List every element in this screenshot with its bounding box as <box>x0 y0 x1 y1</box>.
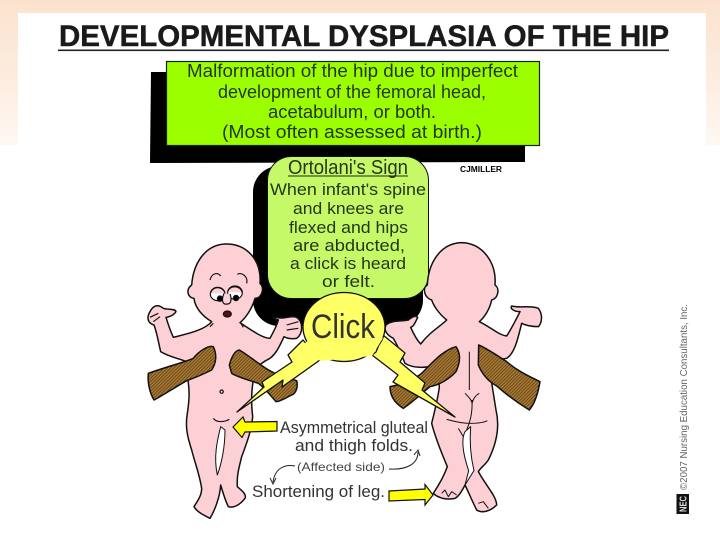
arrow: to left thigh <box>233 417 277 438</box>
face <box>210 274 247 317</box>
Ortolani text: or felt. <box>322 272 375 291</box>
panel: Ortolani's sign <box>253 156 428 326</box>
click bubble with lightning bolts <box>237 292 455 417</box>
arrow: to right foot <box>389 484 433 505</box>
definition text: acetabulum, or both. <box>268 102 436 122</box>
right lightning bolt <box>372 335 455 417</box>
baby body back <box>385 243 541 512</box>
publisher logo: NEC <box>678 496 690 512</box>
Ortolani text: are abducted, <box>293 236 405 255</box>
label: shortening of leg: Shortening of leg. <box>252 482 385 501</box>
left baby (front view) <box>148 244 302 518</box>
Ortolani heading: Ortolani's Sign <box>288 157 408 179</box>
Ortolani text: a click is heard <box>290 254 406 273</box>
Ortolani text: When infant's spine <box>270 180 426 199</box>
left baby's hands <box>148 346 297 402</box>
label: affected side with curved arrows <box>270 450 420 484</box>
publisher logo <box>676 494 690 514</box>
copyright credit: ©2007 Nursing Education Consultants, Inc. <box>679 304 690 490</box>
label: asymmetrical folds: and thigh folds. <box>295 437 413 455</box>
Ortolani text: flexed and hips <box>289 218 408 237</box>
right baby (back view) <box>385 243 541 512</box>
panel: definition <box>150 61 540 163</box>
Ortolani text <box>270 180 426 291</box>
right baby's hands <box>390 345 540 410</box>
click label: Click <box>311 308 376 346</box>
left lightning bolt <box>237 340 320 412</box>
label: asymmetrical folds: Asymmetrical gluteal <box>280 419 428 437</box>
artist signature: CJMILLER <box>460 165 502 174</box>
title: DEVELOPMENTAL DYSPLASIA OF THE HIP <box>59 20 669 53</box>
definition text: (Most often assessed at birth.) <box>222 122 482 142</box>
click bubble <box>303 292 385 362</box>
definition text <box>187 61 518 142</box>
label: affected side with curved arrows: (Affected side) <box>297 460 385 474</box>
definition text: development of the femoral head, <box>218 82 486 102</box>
baby body front <box>148 244 302 518</box>
leg gap <box>463 427 474 485</box>
label: asymmetrical folds <box>280 419 428 455</box>
leg gap <box>216 427 225 475</box>
Ortolani text: and knees are <box>293 199 404 218</box>
definition text: Malformation of the hip due to imperfect <box>187 61 518 81</box>
